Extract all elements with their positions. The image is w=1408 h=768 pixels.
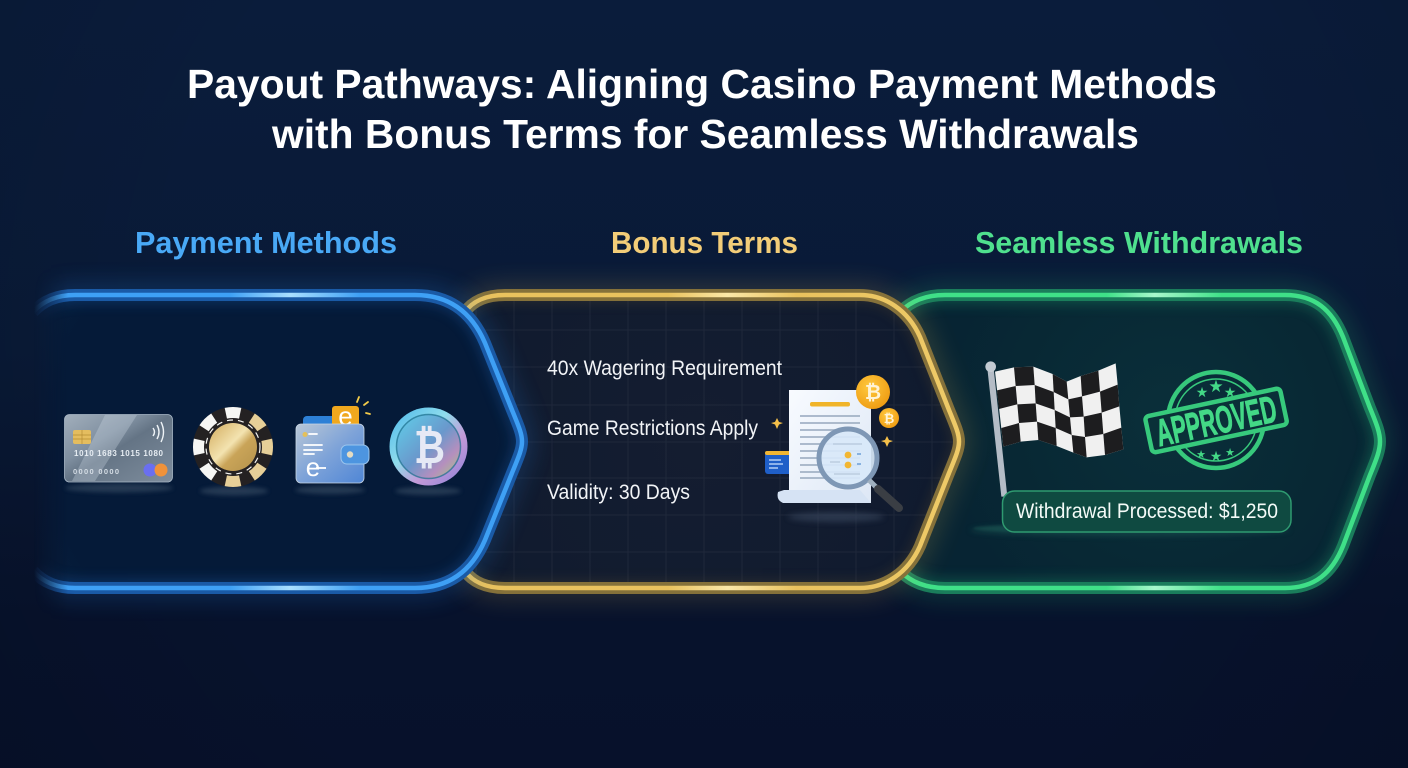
icon: approved stamp: ★: [1196, 384, 1208, 400]
icon: e-wallet: e: [306, 452, 320, 482]
callout: withdrawal processed: [970, 491, 1291, 536]
panel: seamless withdrawals: [900, 295, 1380, 588]
icon: bitcoin coin: ₿: [414, 421, 445, 473]
icon: approved stamp: ★: [1196, 449, 1206, 461]
heading: Bonus Terms: Bonus Terms: [611, 225, 798, 260]
icon: credit card: 1010 1683 1015 1080: [74, 449, 164, 458]
heading: Seamless Withdrawals: Seamless Withdrawals: [975, 225, 1303, 260]
title: [187, 61, 1217, 157]
icon: casino chip: [185, 399, 281, 496]
callout: withdrawal processed: Withdrawal Processed: $1,250: [1016, 500, 1278, 523]
icon: e-wallet: e: [338, 401, 353, 431]
icon: document with magnifier and coins: ₿: [884, 411, 894, 426]
panel: bonus terms: [465, 295, 962, 588]
icon: document with magnifier and coins: [765, 375, 899, 522]
icon: credit card: 0000 0000: [73, 467, 119, 476]
icon: approved stamp: ★: [1225, 447, 1235, 459]
icon: approved stamp: ★: [1224, 384, 1236, 400]
icon: approved stamp: ★: [1210, 448, 1222, 464]
text: wagering requirement: 40x Wagering Requirement: [547, 357, 782, 380]
text: validity: Validity: 30 Days: [547, 481, 690, 504]
title: Payout Pathways: Aligning Casino Payment Methods: [187, 61, 1217, 107]
text: game restrictions: Game Restrictions Apply: [547, 417, 758, 440]
icon: e-wallet: [295, 397, 370, 494]
icon: approved stamp: APPROVED: [1152, 389, 1280, 455]
icon: approved stamp: ★: [1208, 377, 1224, 396]
icon: document with magnifier and coins: ₿: [865, 382, 881, 404]
icon: approved stamp: [1145, 372, 1288, 468]
panel: payment methods: [33, 295, 522, 588]
heading: Payment Methods: Payment Methods: [135, 225, 397, 260]
title: with Bonus Terms for Seamless Withdrawals: [271, 111, 1139, 157]
icon: credit card: [64, 414, 173, 492]
icon: bitcoin coin: [390, 408, 468, 495]
icon: checkered flag: [973, 361, 1147, 532]
